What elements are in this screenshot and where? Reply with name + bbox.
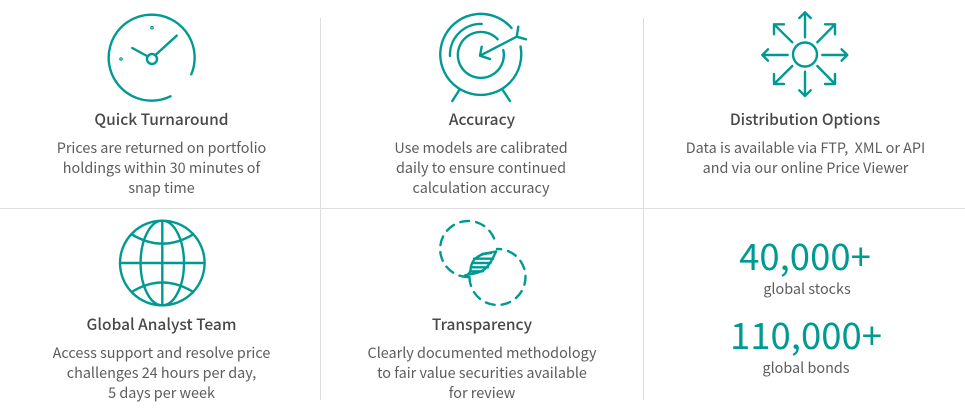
icon: overlapping dashed circles with helix: [440, 221, 526, 305]
text: quick turnaround body: holdings within 30 minutes of: [63, 157, 260, 178]
text: accuracy body: daily to ensure continued: [396, 157, 566, 178]
text: global analyst body: challenges 24 hours per day,: [67, 362, 256, 383]
heading: quick turnaround: Quick Turnaround: [94, 108, 229, 130]
label: global bonds: global bonds: [762, 357, 850, 378]
icon: globe: [120, 221, 205, 305]
text: transparency body: [368, 342, 596, 403]
heading: accuracy: Accuracy: [449, 108, 515, 130]
text: distribution body: Data is available via FTP, XML or API: [686, 137, 925, 158]
icon: clock: [109, 15, 195, 101]
text: global analyst body: Access support and resolve price: [53, 342, 270, 363]
text: global analyst body: 5 days per week: [108, 382, 215, 403]
text: transparency body: to fair value securities available: [377, 362, 587, 383]
heading: global analyst team: Global Analyst Team: [87, 313, 236, 335]
text: global analyst body: [52, 342, 270, 403]
text: quick turnaround body: [57, 137, 266, 198]
text: distribution body: [686, 137, 925, 178]
text: accuracy body: [394, 137, 568, 198]
stat: global stocks number: 40,000+: [739, 228, 871, 281]
heading: distribution options: Distribution Options: [730, 108, 880, 130]
icon: target with arrow: [440, 14, 526, 101]
text: accuracy body: Use models are calibrated: [394, 137, 568, 158]
heading: transparency: Transparency: [432, 313, 532, 335]
icon: distribution arrows: [762, 12, 847, 96]
label: global stocks: global stocks: [763, 278, 851, 299]
text: transparency body: Clearly documented methodology: [368, 342, 596, 363]
text: transparency body: for review: [449, 382, 515, 403]
text: distribution body: and via our online Price Viewer: [703, 157, 908, 178]
stat: global bonds number: 110,000+: [730, 307, 882, 360]
text: quick turnaround body: snap time: [128, 177, 195, 198]
text: quick turnaround body: Prices are returned on portfolio: [57, 137, 266, 158]
text: accuracy body: calculation accuracy: [413, 177, 549, 198]
